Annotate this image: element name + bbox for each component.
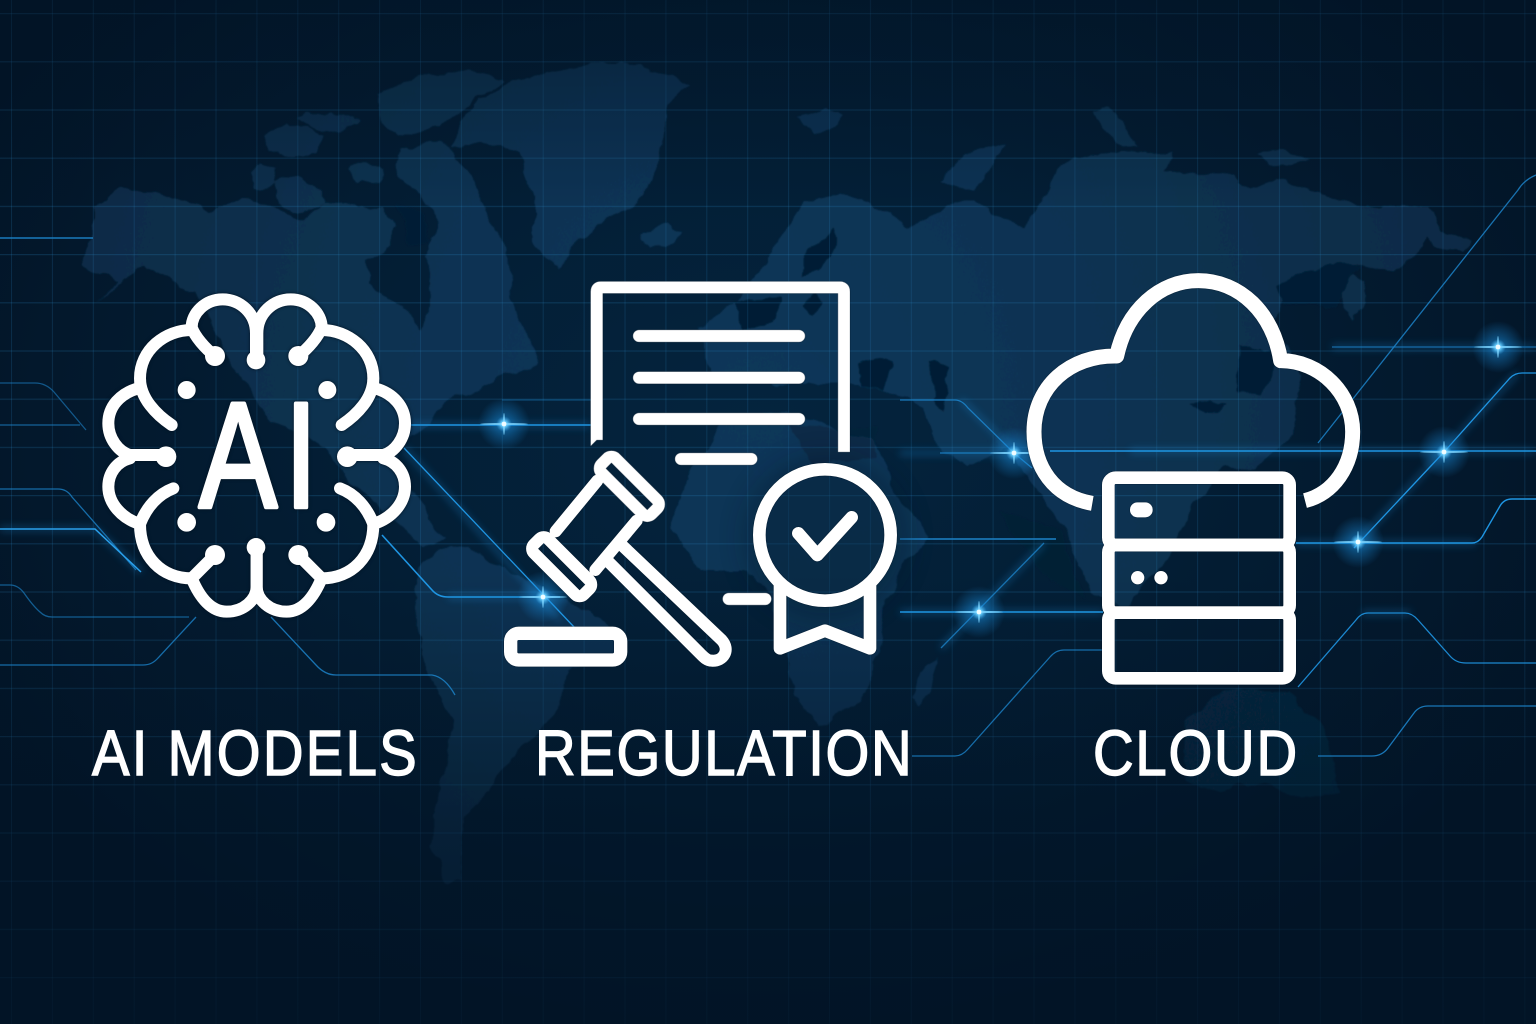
cloud <box>1034 281 1353 503</box>
icon: cloud and server <box>1034 281 1353 678</box>
gavel <box>511 454 726 661</box>
seal <box>759 469 891 648</box>
label: AI MODELS: AI MODELS <box>92 717 417 789</box>
document <box>591 287 844 599</box>
icon: document with gavel and seal <box>511 287 891 661</box>
seal halo <box>742 454 910 622</box>
icon text: AI: AI <box>199 371 317 539</box>
label: CLOUD: CLOUD <box>1093 717 1297 789</box>
label: REGULATION: REGULATION <box>535 717 912 789</box>
server <box>1108 478 1290 678</box>
icon: AI brain <box>108 299 405 612</box>
seas and inland water <box>395 205 1361 600</box>
glow nodes <box>478 321 1524 638</box>
world map <box>81 60 1474 880</box>
circuit lines <box>0 175 1536 756</box>
